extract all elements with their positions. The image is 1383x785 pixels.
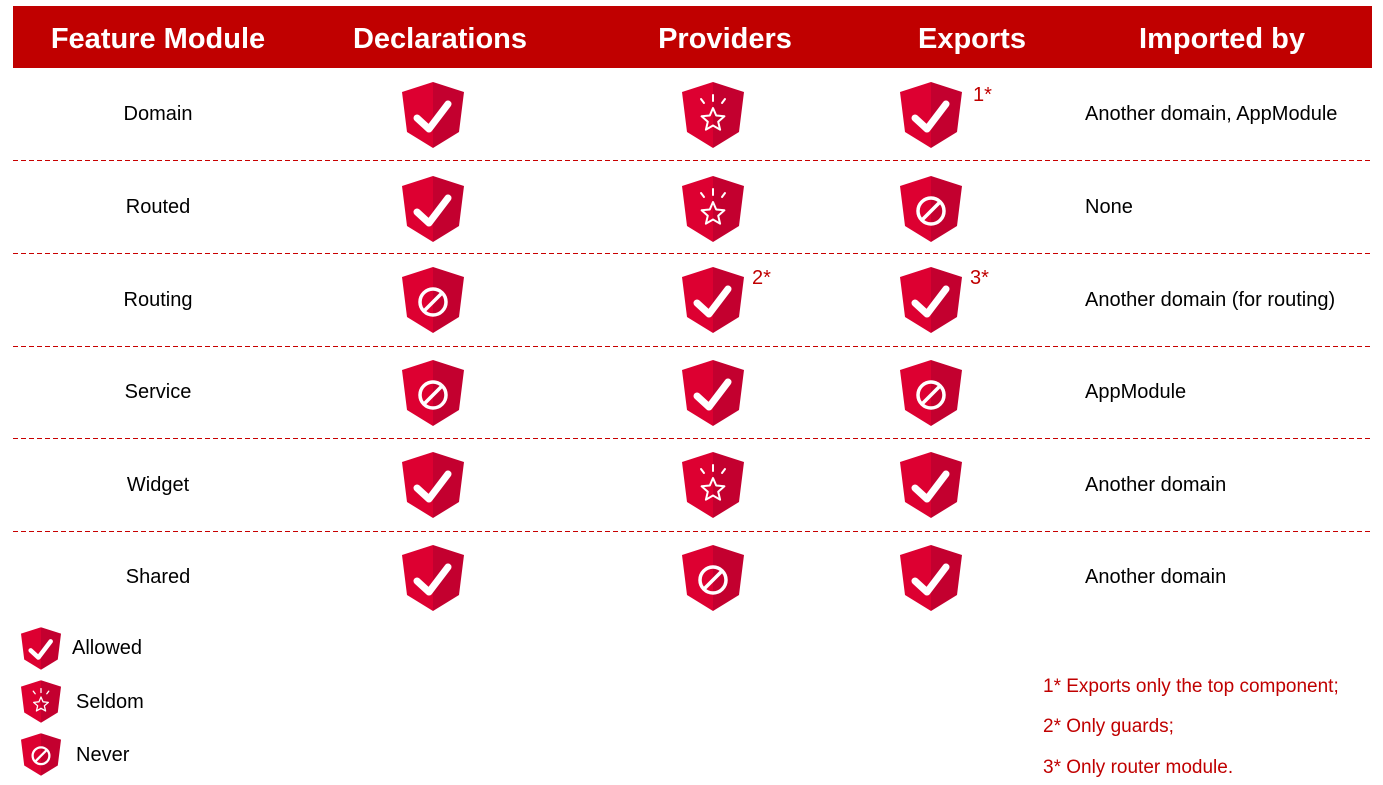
row: Routed: Routed [126,196,190,218]
row: Routing: Another domain (for routing) [1085,289,1335,311]
footnotes: 1* Exports only the top component; [1043,676,1339,697]
header bar: Declarations [353,23,527,55]
row: Routing [124,267,1335,333]
row: Shared [126,545,1226,611]
legend [21,627,144,776]
row: Service: Service [125,381,191,403]
table rows [124,82,1337,611]
row: Domain: Another domain, AppModule [1085,103,1337,125]
legend: Never [76,744,130,766]
header bar: Imported by [1139,23,1305,55]
footnotes [1043,676,1339,778]
header bar: Exports [918,23,1026,55]
row: Routing: 2* [752,267,771,289]
footnotes: 2* Only guards; [1043,716,1174,737]
legend: Allowed [72,637,142,659]
header bar [13,6,1372,68]
row: Service [125,360,1186,426]
row: Domain: 1* [973,84,992,106]
row: Routed: None [1085,196,1133,218]
row: Routing: 3* [970,267,989,289]
header bar: Providers [658,23,792,55]
legend: Seldom [76,691,144,713]
row: Domain [124,82,1337,148]
row: Shared: Shared [126,566,190,588]
row: Routing: Routing [124,289,192,311]
header bar: Feature Module [51,23,265,55]
row: Widget: Another domain [1085,474,1226,496]
footnotes: 3* Only router module. [1043,757,1233,778]
row: Shared: Another domain [1085,566,1226,588]
row: Service: AppModule [1085,381,1186,403]
row: Widget [127,452,1226,518]
row: Domain: Domain [124,103,192,125]
row: Widget: Widget [127,474,190,496]
row: Routed [126,176,1133,242]
